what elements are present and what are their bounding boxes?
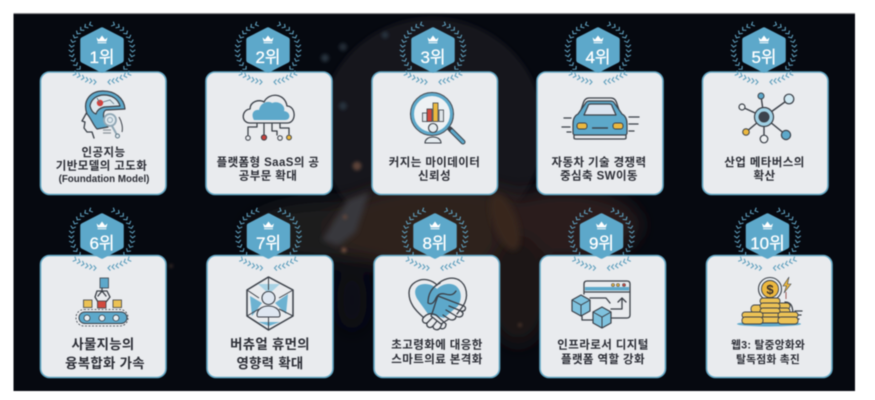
badge 5: 5위	[751, 48, 777, 67]
icon: heart handshake	[409, 278, 466, 330]
icon: network	[739, 93, 794, 143]
label 6: 융복합화 가속	[65, 356, 145, 371]
label 4: 자동차 기술 경쟁력	[551, 155, 647, 169]
label 6: 사물지능의	[71, 337, 135, 352]
label 6	[65, 337, 145, 371]
badge 4: 4위	[585, 48, 611, 67]
badge 9	[568, 208, 635, 271]
label 5	[724, 155, 805, 182]
label 9: 플랫폼 역할 강화	[561, 352, 645, 366]
icon: AI head	[82, 91, 125, 138]
badge 10: 10위	[750, 234, 785, 253]
card 3	[372, 22, 498, 195]
label 3	[389, 155, 480, 182]
label 1	[56, 146, 149, 185]
icon: digital platform window	[572, 281, 630, 328]
icon: car	[562, 98, 639, 139]
card 9	[540, 208, 666, 378]
card 4	[537, 22, 663, 195]
card 1	[40, 22, 166, 195]
label 3: 신뢰성	[418, 170, 451, 182]
label 1: 기반모델의 고도화	[56, 158, 147, 172]
label 7	[230, 337, 310, 371]
card 8	[374, 208, 500, 378]
label 1: (Foundation Model)	[59, 174, 149, 185]
label 7: 버츄얼 휴먼의	[230, 337, 310, 352]
badge 9: 9위	[589, 234, 614, 253]
badge 2: 2위	[255, 48, 281, 67]
badge 7: 7위	[256, 234, 281, 253]
icon: coins: $	[766, 282, 774, 297]
label 9: 인프라로서 디지털	[557, 338, 649, 352]
hands	[245, 184, 640, 345]
label 3: 커지는 마이데이터	[389, 155, 480, 169]
badge 7	[235, 208, 302, 271]
badge 5	[731, 22, 797, 85]
card 6	[40, 208, 166, 378]
label 8	[391, 338, 483, 366]
badge 6	[69, 208, 135, 271]
badge 1: 1위	[89, 48, 115, 67]
icon: coins	[737, 277, 802, 326]
badge 8	[402, 208, 468, 271]
label 8: 초고령화에 대응한	[391, 338, 483, 352]
label 9	[557, 338, 649, 366]
badge 8: 8위	[422, 234, 448, 253]
label 10	[731, 338, 805, 366]
label 7: 영향력 확대	[236, 355, 304, 371]
label 4	[551, 155, 647, 182]
label 2: 플랫폼형 SaaS의 공	[217, 155, 319, 169]
badge 10	[734, 208, 801, 271]
card 2	[206, 22, 332, 195]
label 4: 중심축 SW이동	[560, 170, 638, 182]
badge 3	[400, 22, 466, 85]
label 1: 인공지능	[82, 146, 125, 159]
label 5: 확산	[754, 168, 775, 182]
icon: conveyor	[76, 278, 128, 326]
label 10: 웹3: 탈중앙화와	[731, 338, 805, 352]
label 2	[217, 155, 319, 182]
label 2: 공부문 확대	[239, 168, 297, 182]
label 5: 산업 메타버스의	[724, 155, 805, 169]
icon: virtual human hexagon	[247, 277, 293, 330]
label 10: 탈독점화 촉진	[736, 352, 800, 366]
badge 2	[235, 22, 301, 85]
badge 6: 6위	[89, 234, 115, 253]
label 8: 스마트의료 본격화	[391, 352, 483, 366]
globe	[320, 18, 544, 242]
badge 4	[565, 22, 631, 85]
icon: cloud	[243, 95, 294, 140]
icon: magnifier with chart	[410, 92, 463, 143]
card 10	[706, 208, 832, 378]
badge 1	[69, 22, 135, 85]
card 5	[702, 22, 828, 195]
badge 3: 3위	[420, 48, 446, 67]
card 7	[207, 208, 333, 378]
